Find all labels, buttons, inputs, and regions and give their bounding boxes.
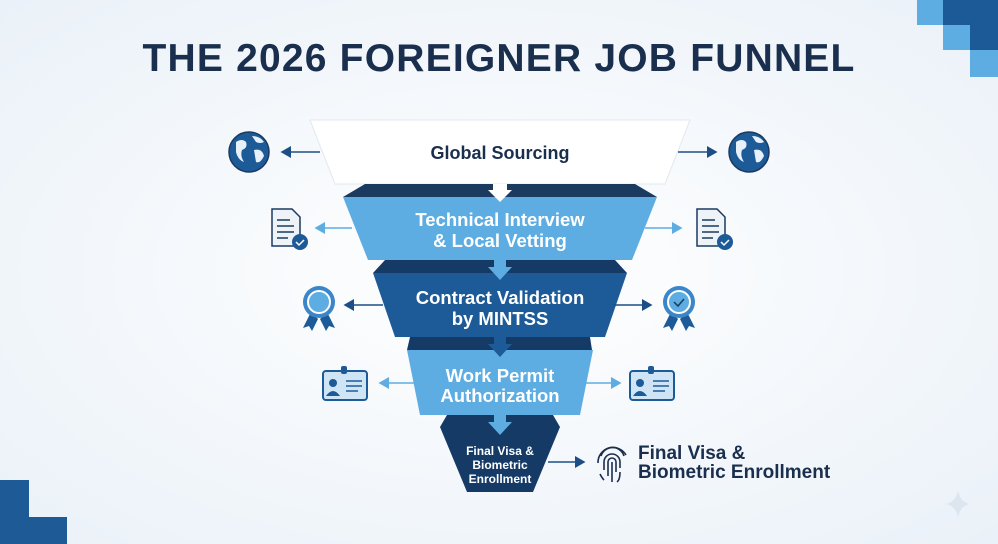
icon: id card left (323, 366, 367, 400)
icon: fingerprint (598, 447, 626, 482)
layer 2: Technical Interview (343, 184, 657, 260)
funnel (310, 120, 690, 492)
decoration: top right squares (917, 0, 998, 77)
icon: globe right (729, 132, 769, 172)
icon: award right (663, 286, 695, 331)
arrow 4 (488, 415, 512, 435)
decoration: sparkle (946, 490, 970, 518)
layer 2: Technical Interview: & Local Vetting (433, 230, 567, 251)
layer 5: Final Visa (440, 415, 560, 492)
layer 5: Final Visa: Enrollment (469, 472, 531, 486)
layer 5: Final Visa: Biometric (472, 458, 528, 472)
icon: document left (272, 209, 308, 250)
layer 5: Final Visa: Final Visa & (466, 444, 534, 458)
arrow 2 (488, 260, 512, 280)
layer 4: Work Permit: Work Permit (446, 365, 554, 386)
layer 1: Global Sourcing: Global Sourcing (430, 143, 570, 163)
icon: id card right (630, 366, 674, 400)
layer 4: Work Permit: Authorization (440, 385, 560, 406)
layer 3: Contract Validation: Contract Validation (416, 287, 584, 308)
arrow 1 (488, 184, 512, 202)
layer 1: Global Sourcing (310, 120, 690, 184)
callout: final visa text: Final Visa & (638, 443, 746, 464)
layer 2: Technical Interview: Technical Interview (415, 209, 585, 230)
callout: final visa text: Biometric Enrollment (638, 462, 831, 483)
decoration: bottom left squares (0, 480, 67, 544)
title: THE 2026 FOREIGNER JOB FUNNEL (142, 37, 856, 80)
icon: document right (697, 209, 733, 250)
layer 3: Contract Validation: by MINTSS (452, 308, 548, 329)
layer 3: Contract Validation (373, 260, 627, 337)
arrow 3 (488, 337, 512, 357)
icon: globe left (229, 132, 269, 172)
side arrows (282, 152, 716, 462)
icon: award left (303, 286, 335, 331)
layer 4: Work Permit (407, 337, 593, 415)
callout: final visa text (638, 443, 831, 483)
